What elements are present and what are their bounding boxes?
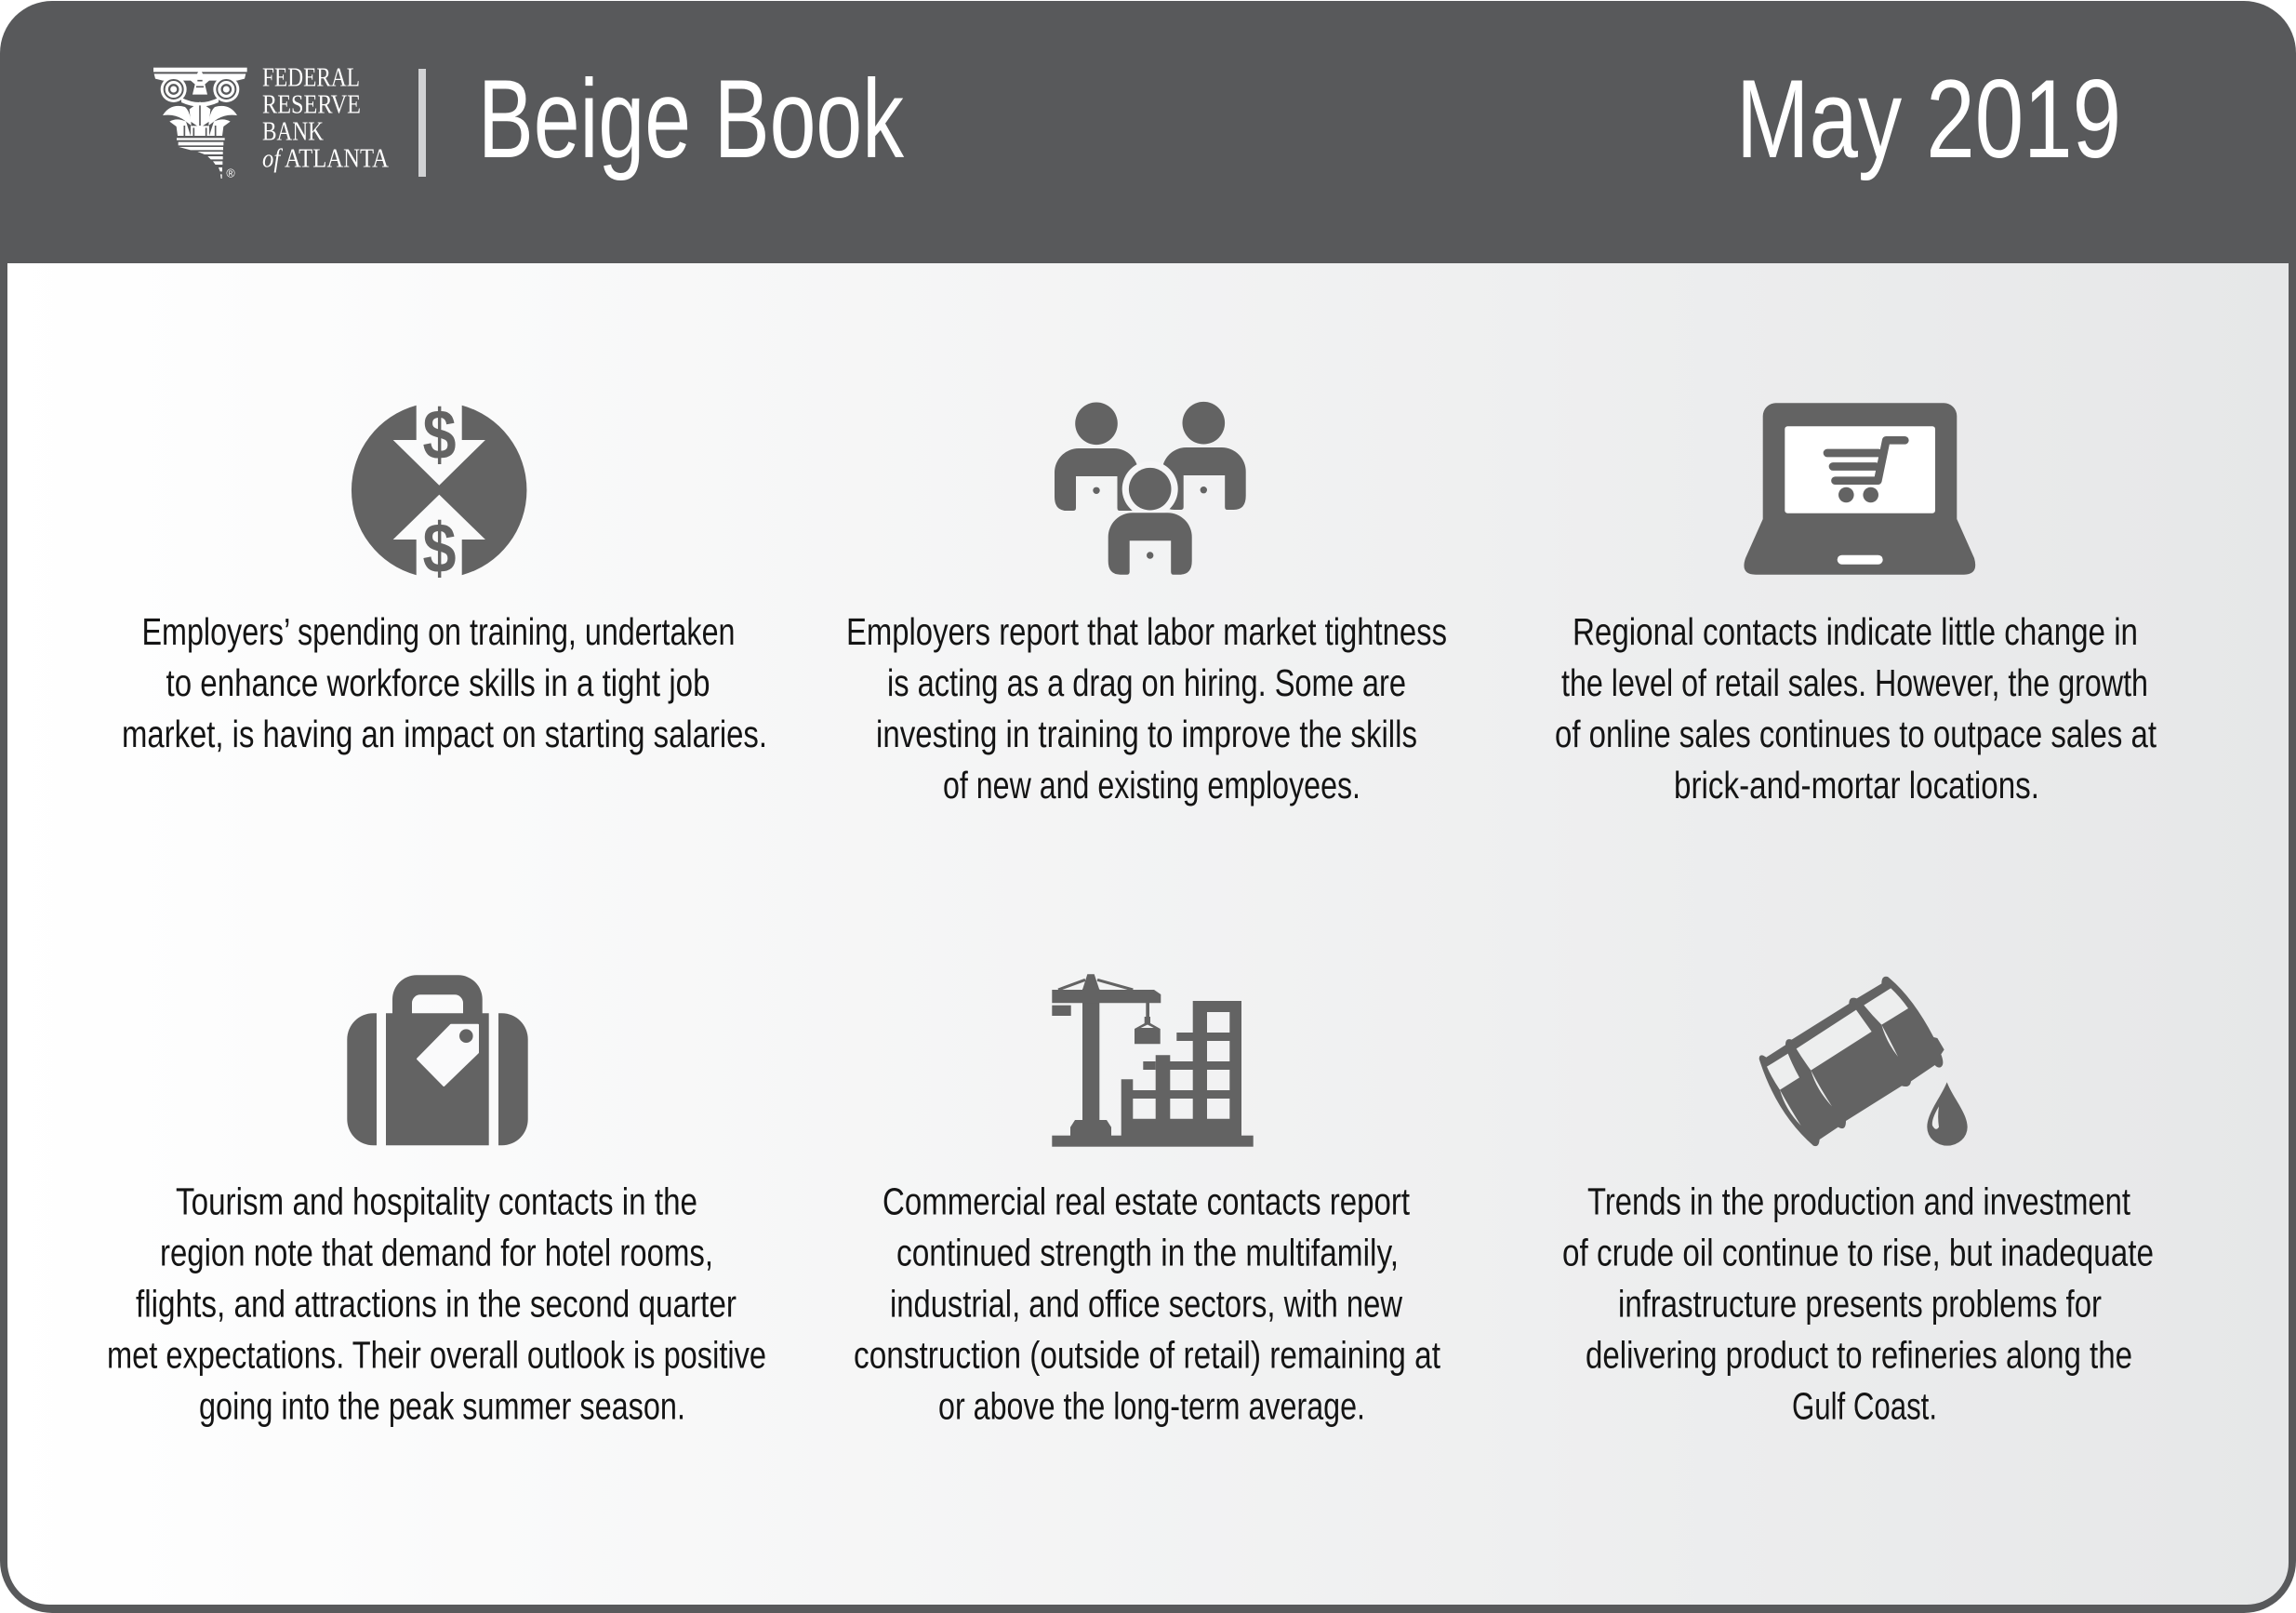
logo column capital — [153, 68, 247, 180]
icon: dollars converging — [352, 396, 526, 588]
icon: crane and building — [1052, 974, 1254, 1147]
logo wordmark: RESERVE — [262, 90, 361, 120]
title: Beige Book — [478, 57, 905, 181]
icon: tipped oil barrel with drop — [1759, 977, 1968, 1146]
text: commercial real estate: industrial, and office sectors, with new — [890, 1282, 1402, 1325]
icon: laptop with shopping cart — [1744, 403, 1975, 575]
panel: crude oil — [1562, 977, 2154, 1427]
logo wordmark: of ATLANTA — [262, 143, 389, 173]
panel: tourism — [107, 975, 766, 1427]
text: labor market tightness: investing in training to improve the skills — [876, 713, 1417, 755]
logo wordmark: FEDERAL — [262, 63, 360, 93]
text: commercial real estate — [854, 1180, 1440, 1427]
text: retail sales: the level of retail sales. However, the growth — [1561, 661, 2148, 704]
text: training and salaries: Employers’ spending on training, undertaken — [141, 610, 735, 653]
logo wordmark: BANK — [262, 117, 324, 147]
icon: suitcase with tag — [347, 975, 528, 1145]
text: retail sales: of online sales continues to outpace sales at — [1555, 713, 2157, 755]
logo column capital: ® — [226, 167, 235, 180]
text: commercial real estate: or above the long-term average. — [938, 1384, 1365, 1427]
text: crude oil: of crude oil continue to rise, but inadequate — [1562, 1232, 2154, 1274]
text: commercial real estate: continued strength in the multifamily, — [896, 1232, 1399, 1274]
text: retail sales: Regional contacts indicate little change in — [1573, 610, 2138, 653]
text: training and salaries: market, is having an impact on starting salaries. — [122, 713, 767, 755]
text: labor market tightness: is acting as a drag on hiring. Some are — [887, 661, 1406, 704]
icon: three people — [1055, 402, 1246, 575]
panel: commercial real estate — [854, 974, 1440, 1427]
text: tourism and hospitality: region note that demand for hotel rooms, — [160, 1232, 713, 1274]
text: training and salaries — [122, 610, 767, 755]
text: crude oil: delivering product to refineries along the — [1586, 1334, 2132, 1377]
text: tourism and hospitality: going into the peak summer season. — [199, 1384, 685, 1427]
text: retail sales: brick-and-mortar locations. — [1674, 764, 2039, 806]
text: labor market tightness — [846, 610, 1447, 806]
text: crude oil: infrastructure presents problems for — [1618, 1282, 2102, 1325]
text: commercial real estate: Commercial real estate contacts report — [883, 1180, 1410, 1222]
title divider — [418, 69, 426, 177]
header — [153, 57, 2121, 181]
icon: dollars converging: $ — [422, 510, 456, 588]
logo: Federal Reserve Bank of Atlanta — [153, 63, 389, 180]
text: training and salaries: to enhance workforce skills in a tight job — [166, 661, 710, 704]
text: crude oil: Gulf Coast. — [1792, 1384, 1937, 1427]
text: crude oil: Trends in the production and investment — [1587, 1180, 2130, 1222]
text: commercial real estate: construction (outside of retail) remaining at — [854, 1334, 1440, 1377]
text: tourism and hospitality — [107, 1180, 766, 1427]
text: crude oil — [1562, 1180, 2154, 1427]
text: retail sales — [1555, 610, 2157, 806]
panel: labor market — [846, 402, 1447, 806]
text: tourism and hospitality: flights, and attractions in the second quarter — [136, 1282, 737, 1325]
panel: retail sales — [1555, 403, 2157, 806]
text: tourism and hospitality: Tourism and hospitality contacts in the — [176, 1180, 697, 1222]
icon: dollars converging: $ — [422, 396, 456, 474]
logo wordmark — [262, 63, 389, 173]
panel: starting salaries — [122, 396, 767, 755]
text: tourism and hospitality: met expectations. Their overall outlook is positive — [107, 1334, 766, 1377]
text: labor market tightness: Employers report that labor market tightness — [846, 610, 1447, 653]
text: labor market tightness: of new and existing employees. — [943, 764, 1360, 806]
date: May 2019 — [1736, 57, 2121, 181]
